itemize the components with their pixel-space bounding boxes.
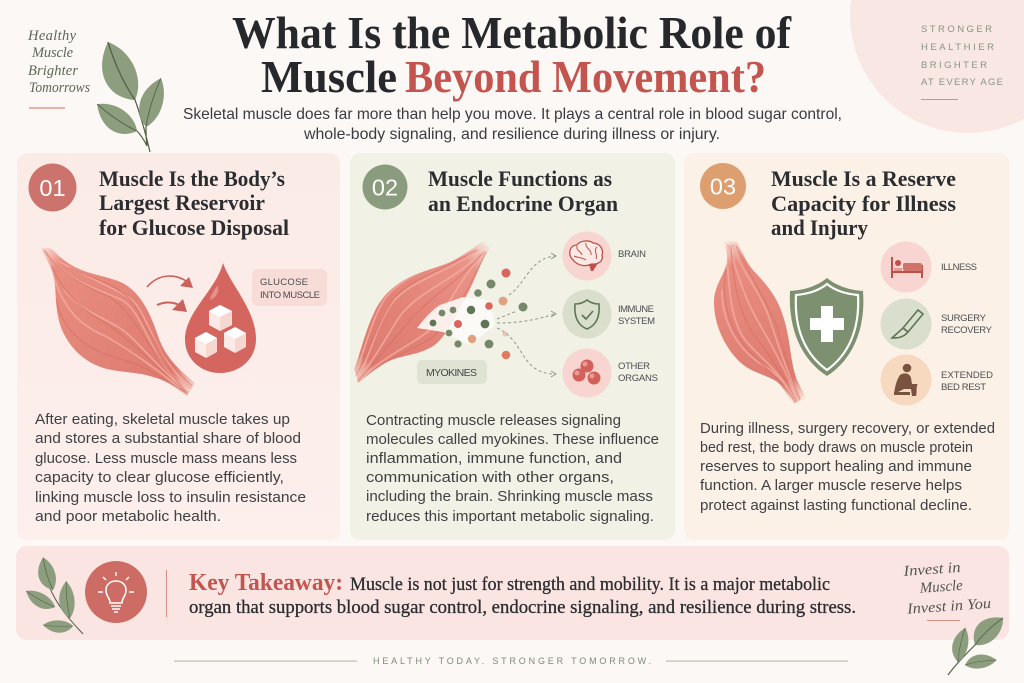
body text 2: inflammation, immune function, and <box>366 451 622 467</box>
body text 1: and poor metabolic health. <box>35 509 221 525</box>
top-right tagline: AT EVERY AGE <box>921 77 1003 88</box>
badge 02: 02 <box>372 174 398 200</box>
muscle illustration 2 <box>354 241 490 383</box>
brain label: BRAIN <box>618 249 646 260</box>
badge 01: 01 <box>39 175 66 201</box>
subtitle <box>183 106 842 143</box>
immune system label <box>618 304 655 327</box>
icon: other organs <box>562 348 612 398</box>
icon: illness bed <box>880 242 932 292</box>
key takeaway banner <box>16 546 1009 640</box>
body text 3: reserves to support healing and immune <box>700 459 972 475</box>
heading 2: Muscle Functions as <box>428 166 612 191</box>
panel 1: glucose disposal <box>17 153 340 540</box>
corner circle <box>850 0 1024 133</box>
other organs label: ORGANS <box>618 373 658 384</box>
badge 02 <box>362 164 408 210</box>
title: What Is the Metabolic Role of <box>232 7 792 58</box>
extended bed rest label <box>941 370 993 393</box>
panel 3: reserve capacity <box>684 153 1009 540</box>
surgery recovery label <box>941 313 993 336</box>
myokine dots <box>430 268 528 359</box>
top-right tagline: STRONGER <box>921 24 992 35</box>
badge 01 <box>28 164 76 212</box>
heading 3: Capacity for Illness <box>771 191 956 216</box>
top-right tagline <box>921 24 1003 100</box>
body text 1: glucose. Less muscle mass means less <box>35 451 297 467</box>
body text 3: function. A larger muscle reserve helps <box>700 478 962 494</box>
myokine burst <box>417 297 495 345</box>
body text 1: capacity to clear glucose efficiently, <box>35 470 284 486</box>
invest underline <box>927 620 960 621</box>
glucose label: GLUCOSE <box>260 277 308 288</box>
body text 1: linking muscle loss to insulin resistance <box>35 490 306 506</box>
body text 3: protect against lasting functional decline. <box>700 498 972 514</box>
body text 2 <box>366 413 659 525</box>
takeaway text <box>189 570 856 618</box>
divider <box>166 570 167 617</box>
badge 03: 03 <box>710 174 736 200</box>
top-left tagline: Healthy <box>27 28 77 44</box>
immune system label: SYSTEM <box>618 316 655 327</box>
badge 03 <box>700 163 746 209</box>
title <box>232 7 792 102</box>
icon: brain <box>562 232 612 280</box>
illness label: ILLNESS <box>941 262 977 273</box>
icon: immune shield <box>562 290 612 338</box>
invest script: Invest in You <box>906 596 992 618</box>
heading 2: an Endocrine Organ <box>428 191 618 216</box>
body text 1 <box>35 412 306 525</box>
arrows to drop <box>147 276 193 312</box>
heading 1: Largest Reservoir <box>99 190 265 215</box>
muscle illustration 3 <box>714 240 806 404</box>
top-left tagline: Brighter <box>28 63 78 79</box>
heading 1: for Glucose Disposal <box>99 215 289 240</box>
subtitle: Skeletal muscle does far more than help you move. It plays a central role in blood sugar control, <box>183 106 842 123</box>
icon: light bulb <box>85 561 147 623</box>
heading 3: and Injury <box>771 215 869 240</box>
top-left tagline: Tomorrows <box>29 80 90 96</box>
icon: person on bed rest <box>880 354 932 406</box>
heading 1: Muscle Is the Body’s <box>99 166 285 191</box>
invest script: Invest in <box>902 560 961 580</box>
extended bed rest label: EXTENDED <box>941 370 993 381</box>
body text 2: communication with other organs, <box>366 470 614 486</box>
heading 3: Muscle Is a Reserve <box>771 166 956 191</box>
title: Beyond Movement? <box>405 51 766 102</box>
top-left tagline: Muscle <box>31 45 74 61</box>
body text 3: bed rest, the body draws on muscle protein <box>700 440 973 456</box>
other organs label: OTHER <box>618 361 650 372</box>
takeaway text: Key Takeaway: <box>189 570 343 596</box>
icon: scalpel <box>880 298 932 350</box>
title: Muscle <box>261 51 397 102</box>
icon: shield with cross <box>790 278 863 376</box>
surgery recovery label: SURGERY <box>941 313 987 324</box>
body text 2: including the brain. Shrinking muscle mass <box>366 489 653 505</box>
body text 2: Contracting muscle releases signaling <box>366 413 621 429</box>
body text 2: reduces this important metabolic signaling. <box>366 509 654 525</box>
invest script <box>902 558 992 618</box>
invest script: Muscle <box>918 578 964 597</box>
heading 2 <box>428 166 618 216</box>
takeaway text: Muscle is not just for strength and mobility. It is a major metabolic <box>350 575 830 595</box>
leaves: bottom right <box>948 609 1009 675</box>
panel 2: endocrine organ <box>350 153 675 540</box>
body text 3: During illness, surgery recovery, or extended <box>700 421 995 437</box>
top-right tagline: BRIGHTER <box>921 60 987 71</box>
extended bed rest label: BED REST <box>941 382 986 393</box>
surgery recovery label: RECOVERY <box>941 325 993 336</box>
glucose label: INTO MUSCLE <box>260 290 320 301</box>
leaves: top left <box>90 36 170 152</box>
subtitle: whole-body signaling, and resilience during illness or injury. <box>303 126 720 143</box>
body text 1: After eating, skeletal muscle takes up <box>35 412 290 428</box>
heading 1 <box>99 166 289 240</box>
footer tagline: HEALTHY TODAY. STRONGER TOMORROW. <box>373 656 651 666</box>
heading 3 <box>771 166 956 240</box>
glucose label <box>252 269 327 306</box>
top-right tagline: HEALTHIER <box>921 42 994 53</box>
muscle illustration 1 <box>40 248 195 396</box>
immune system label: IMMUNE <box>618 304 654 315</box>
body text 1: and stores a substantial share of blood <box>35 431 301 447</box>
top-left tagline <box>27 28 90 108</box>
dashed signal arrows <box>497 253 556 377</box>
leaves: banner left <box>22 555 83 634</box>
other organs label <box>618 361 658 384</box>
glucose drop <box>185 263 256 373</box>
body text 2: molecules called myokines. These influence <box>366 432 659 448</box>
myokines label <box>417 360 487 384</box>
takeaway text: organ that supports blood sugar control, endocrine signaling, and resilience during stress. <box>189 598 856 618</box>
myokines label: MYOKINES <box>426 367 477 379</box>
body text 3 <box>700 421 995 514</box>
